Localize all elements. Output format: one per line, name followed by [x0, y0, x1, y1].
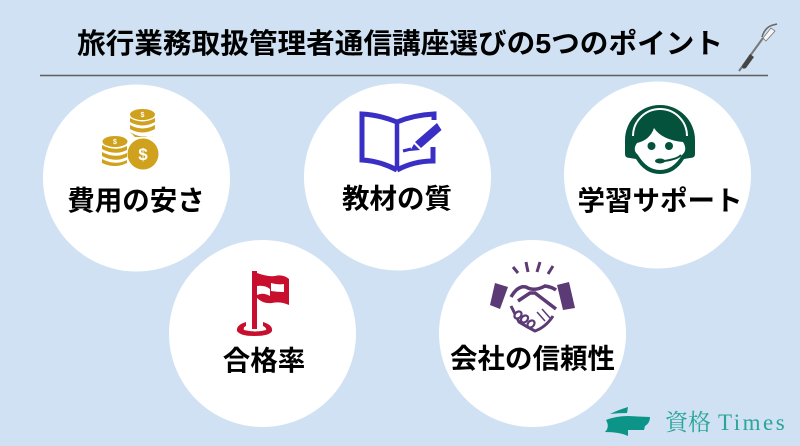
panel: cost: [43, 84, 230, 272]
icon: coins: $: [113, 139, 117, 146]
icon: open book with pen: [362, 114, 442, 170]
logo text: 資格: [665, 410, 711, 435]
label: materials: 教材の質: [342, 183, 452, 214]
icon: coins: [102, 109, 158, 170]
icon: pen: [739, 24, 777, 71]
icon: flag: [237, 271, 289, 336]
logo: 資格Times: [605, 407, 787, 436]
label: cost: 費用の安さ: [67, 185, 205, 216]
panel: support: [564, 82, 751, 268]
label: support: 学習サポート: [578, 185, 742, 216]
icon: headset operator: [625, 105, 695, 174]
icon: coins: $: [141, 112, 145, 119]
icon: handshake: [490, 262, 575, 331]
icon: coins: $: [138, 145, 148, 164]
panel: materials: [304, 84, 491, 270]
label: reliability: 会社の信頼性: [450, 343, 615, 374]
logo text: Times: [718, 410, 787, 435]
panel: pass rate: [169, 240, 356, 427]
icon: logo ribbon: [605, 407, 650, 436]
label: pass rate: 合格率: [223, 345, 305, 376]
title: 旅行業務取扱管理者通信講座選びの5つのポイント: [77, 28, 723, 59]
panel: reliability: [439, 240, 626, 427]
